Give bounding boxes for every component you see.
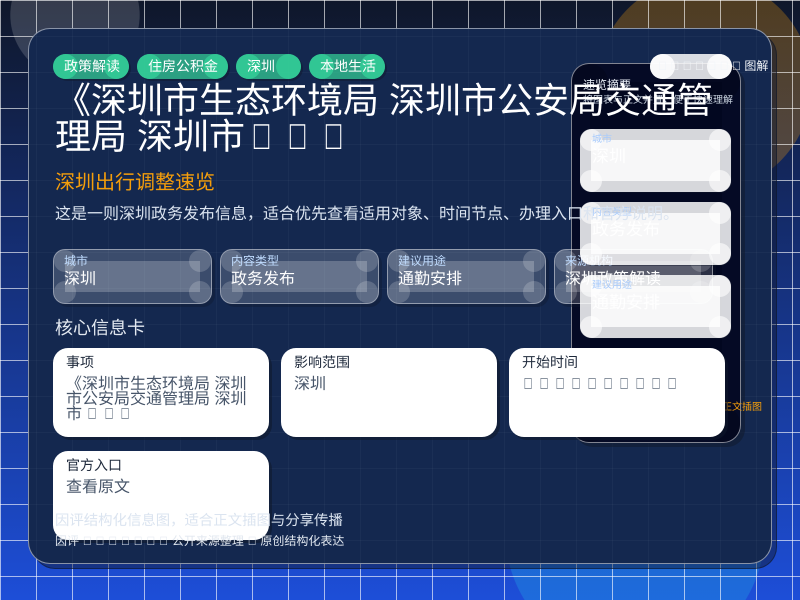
side heading: 速览摘要 — [583, 78, 631, 92]
side card: 内容类型: 政务发布 — [592, 220, 660, 239]
side card: 城市: 深圳 — [592, 147, 626, 166]
title:  — [287, 116, 308, 157]
metric: 来源机构: 来源机构 — [565, 254, 613, 268]
tag: 本地生活: 本地生活 — [320, 58, 376, 74]
card: 开始时间:  — [588, 376, 597, 393]
tag: 政策解读: 政策解读 — [64, 58, 120, 74]
metric: 来源机构: 深圳政策解读 — [565, 271, 661, 288]
side card: 建议用途: 通勤安排 — [592, 293, 660, 312]
orange side note: 正文插图 — [722, 402, 762, 413]
card: 开始时间:  — [604, 376, 613, 393]
subtitle: 深圳出行调整速览 — [55, 172, 215, 194]
card: 开始时间:  — [555, 376, 565, 393]
side card: 内容类型 — [580, 202, 731, 265]
card: 影响范围 — [281, 348, 497, 437]
card: 事项:  — [121, 406, 130, 423]
summary: 这是一则深圳政务发布信息，适合优先查看适用对象、时间节点、办理入口和官方说明。 — [55, 206, 679, 223]
metric: 内容类型: 政务发布 — [231, 271, 295, 288]
card: 开始时间:  — [636, 376, 645, 393]
tag text: 图解:        图解 — [658, 59, 768, 73]
card: 影响范围: 影响范围 — [294, 354, 350, 370]
card: 事项 — [53, 348, 269, 437]
side card: 城市 — [580, 129, 731, 192]
card: 事项:  — [104, 406, 114, 423]
card: 事项:  — [88, 406, 97, 423]
tag: 政策解读 — [53, 54, 129, 79]
title: 《深圳市生态环境局 深圳市公安局交通管 — [55, 80, 713, 121]
metric: 城市: 深圳 — [64, 271, 96, 288]
metric: 建议用途: 建议用途 — [398, 254, 446, 268]
card: 事项: 《深圳市生态环境局 深圳市公安局交通管理局 深圳市 — [66, 376, 246, 423]
background circle: top left — [10, 0, 140, 80]
metric: 内容类型 — [220, 249, 379, 304]
tag: 住房公积金: 住房公积金 — [148, 58, 218, 74]
tagline: 因评结构化信息图，适合正文插图与分享传播 — [55, 513, 343, 529]
title — [55, 80, 713, 157]
card: 官方入口: 查看原文 — [66, 479, 130, 496]
card: 开始时间:  — [539, 376, 549, 393]
card: 开始时间: 开始时间 — [522, 354, 578, 370]
title:  — [251, 116, 272, 157]
tag: 住房公积金 — [137, 54, 228, 79]
side card: 建议用途: 建议用途 — [592, 280, 632, 291]
card: 开始时间:  — [652, 376, 661, 393]
metric: 建议用途 — [387, 249, 546, 304]
side description: 将图表与正文并置，便于快速理解 — [583, 95, 733, 106]
metric: 城市 — [53, 249, 212, 304]
side card: 建议用途 — [580, 275, 731, 338]
card: 官方入口: 官方入口 — [66, 457, 122, 473]
side panel: overview — [571, 63, 741, 443]
metric: 来源机构 — [554, 249, 713, 304]
card: 事项: 事项 — [66, 354, 94, 370]
card: 官方入口 — [53, 451, 269, 540]
background circle: top right orange — [596, 0, 800, 193]
tag: white pill — [650, 54, 732, 79]
section heading: 核心信息卡 — [55, 318, 145, 338]
tag: 深圳: 深圳 — [247, 58, 275, 74]
card: 开始时间:  — [620, 376, 629, 393]
tag: 本地生活 — [309, 54, 385, 79]
card: 开始时间:  — [523, 376, 533, 393]
background circle: bottom cyan — [505, 402, 765, 600]
side card: 内容类型: 内容类型 — [592, 207, 632, 218]
card: 开始时间:  — [668, 376, 677, 393]
card: 影响范围: 深圳 — [294, 376, 326, 393]
footer source: 因评        公开来源整理  原创结构化表达 — [55, 534, 344, 548]
title: 理局 深圳市 — [55, 116, 245, 157]
metric: 建议用途: 通勤安排 — [398, 271, 462, 288]
card: 开始时间:  — [571, 376, 581, 393]
card: 开始时间 — [509, 348, 725, 437]
side card: 城市: 城市 — [592, 134, 612, 145]
metric: 内容类型: 内容类型 — [231, 254, 279, 268]
tag: 深圳 — [236, 54, 301, 79]
title:  — [323, 116, 344, 157]
metric: 城市: 城市 — [64, 254, 88, 268]
